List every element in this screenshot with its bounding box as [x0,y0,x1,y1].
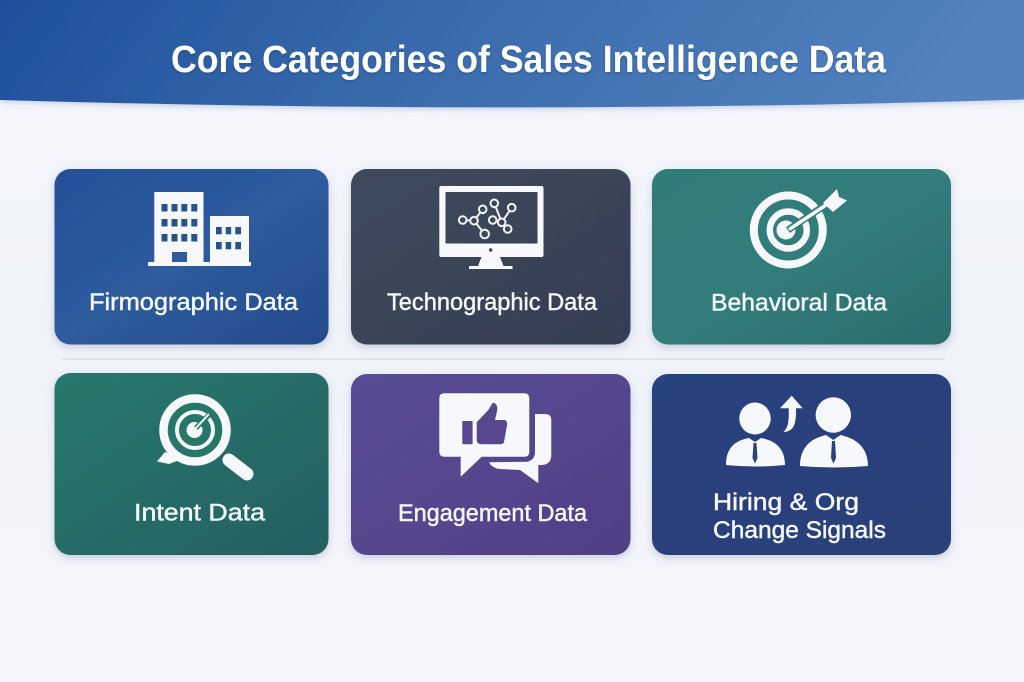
label: Intent Data: Intent Data [134,500,266,526]
panel: Engagement Data [351,374,630,555]
panel: Behavioral Data [652,169,951,344]
panel: Firmographic Data [54,169,328,344]
header banner [0,0,1024,107]
icon: speech bubbles with thumbs up [439,393,551,483]
panel: Technographic Data [351,169,630,344]
icon: magnifier with target [157,398,247,474]
icon: two people with up arrow [726,396,868,468]
label: Technographic Data: Technographic Data [387,289,598,316]
panel: Hiring & Org Change Signals [652,374,951,555]
icon: monitor with network [439,186,544,269]
icon: target with arrow [754,189,847,264]
icon: office buildings [148,192,251,266]
title: Core Categories of Sales Intelligence Data [171,39,887,81]
label: Engagement Data: Engagement Data [398,500,588,527]
label: Hiring & Org Change Signals: Hiring & Org [713,489,859,516]
panel: Intent Data [54,373,328,555]
label: Firmographic Data: Firmographic Data [89,289,299,316]
label: Behavioral Data: Behavioral Data [711,290,888,316]
label: Hiring & Org Change Signals: Change Signals [713,517,886,544]
label: Hiring & Org Change Signals [713,489,886,544]
